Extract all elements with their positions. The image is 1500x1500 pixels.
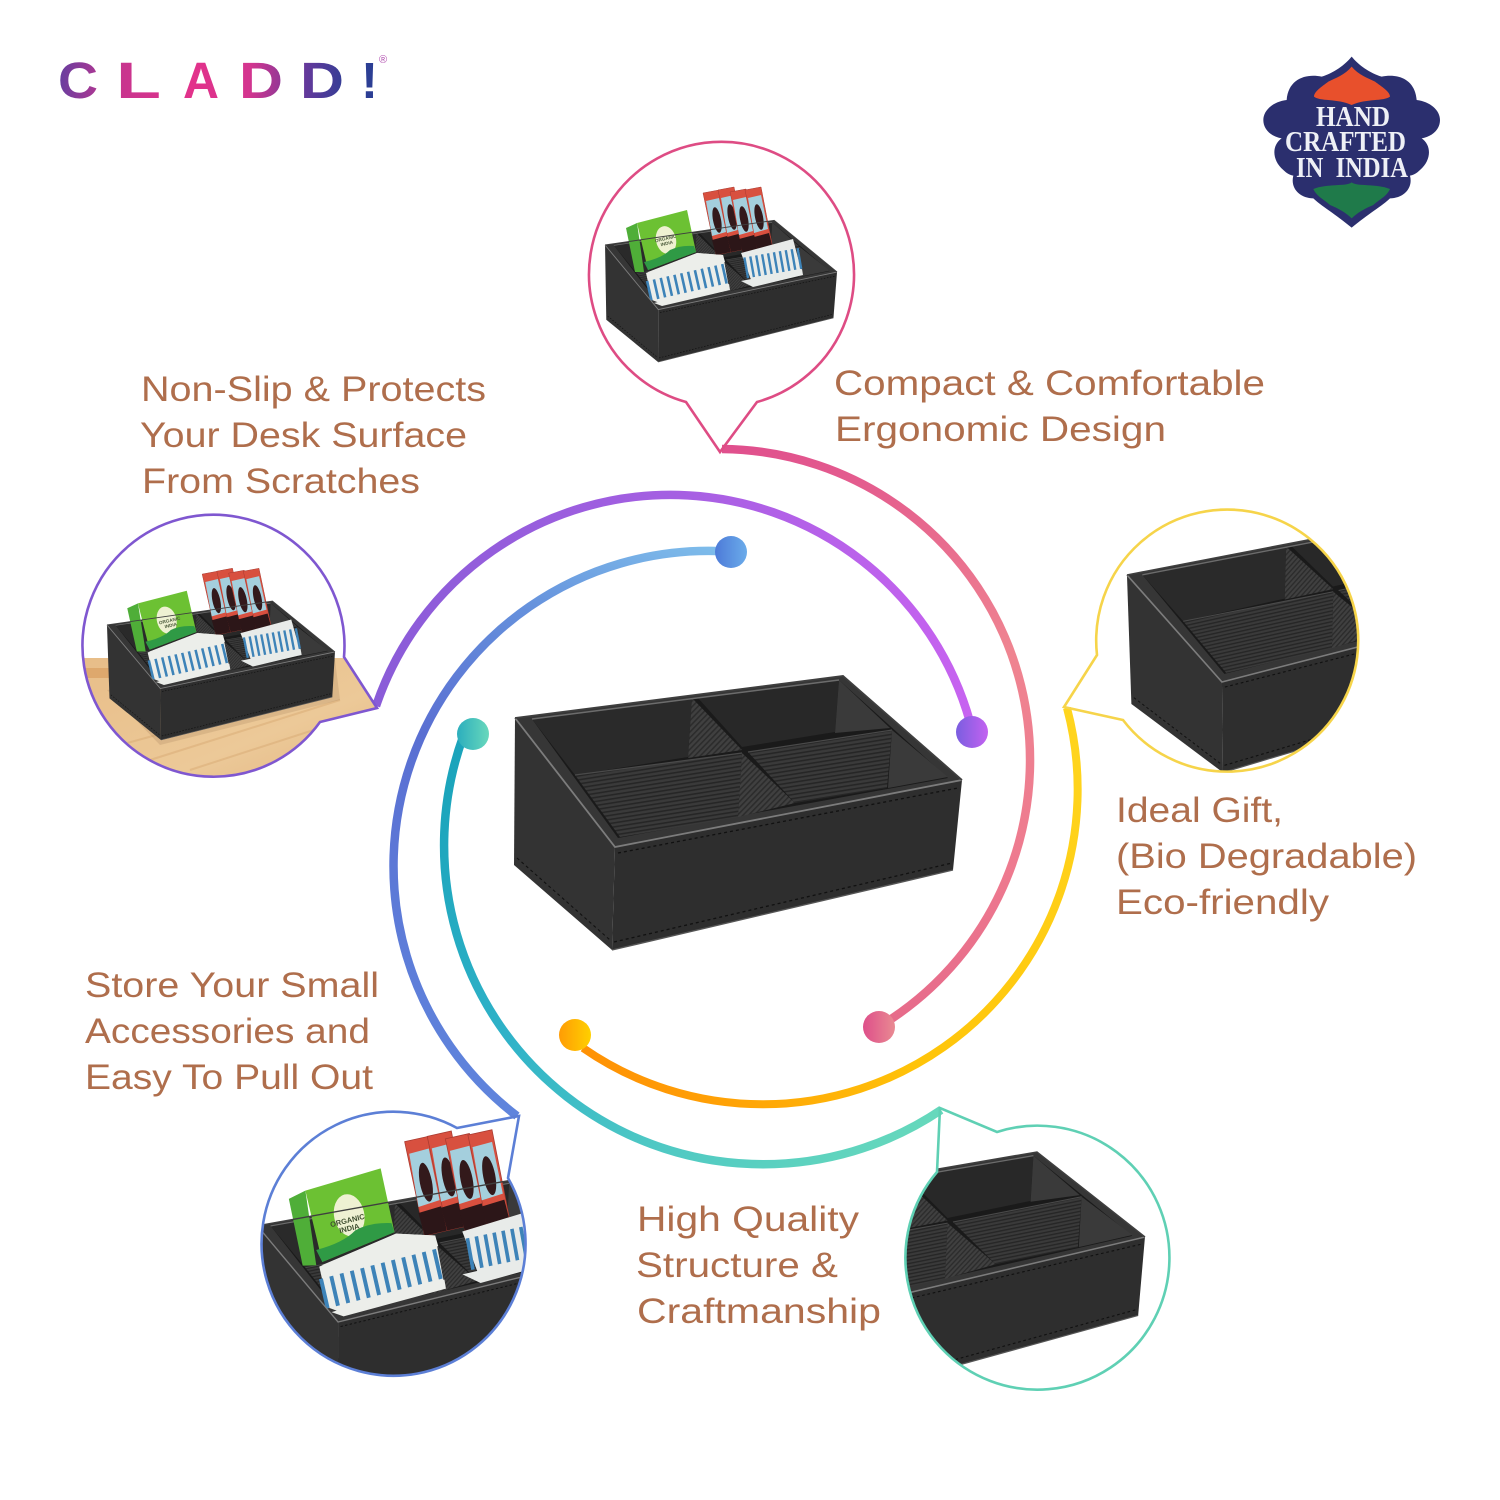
logo: CLADDI wordmark: ® [379,54,387,66]
callout bubble: compact design (pink) [589,142,854,452]
callout bubble: structure close-up (teal) [904,1106,1171,1391]
callout bubble: compact design (pink): INDIA [660,239,674,247]
text: compact and comfortable: Ergonomic Design [835,410,1166,449]
text: compact and comfortable [834,364,1265,449]
logo: CLADDI wordmark: A [183,52,219,109]
callout bubble: stored accessories close-up (blue) [260,1110,527,1378]
text: store accessories: Easy To Pull Out [85,1058,373,1097]
text: non-slip: Non-Slip & Protects [141,370,486,409]
central product: black organizer box [514,676,962,950]
text: high quality: High Quality [637,1200,860,1239]
callout bubble: non-slip on wood desk (purple): ORGANIC [159,616,181,625]
callout bubble: non-slip on wood desk (purple): INDIA [164,621,178,629]
text: non-slip: From Scratches [142,462,420,501]
text: high quality: Structure & [636,1246,838,1285]
text: ideal gift: (Bio Degradable) [1116,837,1417,876]
text: high quality [636,1200,881,1331]
badge: hand crafted in India: CRAFTED [1285,127,1406,158]
dot: blue arc end [715,536,747,568]
logo: CLADDI wordmark: D [300,52,344,109]
text: non-slip [140,370,486,501]
dot: purple arc end [956,716,988,748]
text: ideal gift [1116,791,1417,922]
dot: pink arc end [863,1011,895,1043]
badge: hand crafted in India [1263,57,1440,228]
logo: CLADDI wordmark: ! [361,52,378,109]
logo: CLADDI wordmark [58,52,387,109]
text: store accessories: Store Your Small [85,966,379,1005]
text: ideal gift: Eco-friendly [1116,883,1330,922]
dot: teal arc end [457,718,489,750]
callout bubble: stored accessories close-up (blue): ORGANIC [329,1212,366,1229]
text: compact and comfortable: Compact & Comfortable [834,364,1265,403]
badge: hand crafted in India: HAND [1316,102,1390,133]
arc: blue [394,551,716,1116]
callout bubble: stored accessories close-up (blue): INDIA [338,1221,361,1235]
arc: pink [722,449,1030,1023]
text: ideal gift: Ideal Gift, [1116,791,1283,830]
callout bubble: box side close-up (yellow) [1062,508,1360,773]
text: store accessories [85,966,379,1097]
arc: yellow [583,708,1078,1104]
arc: teal [444,737,941,1164]
dot: orange arc end [559,1019,591,1051]
badge: hand crafted in India: IN INDIA [1296,153,1409,184]
text: high quality: Craftmanship [637,1292,881,1331]
callout bubble: compact design (pink): ORGANIC [655,234,677,243]
text: non-slip: Your Desk Surface [140,416,467,455]
logo: CLADDI wordmark: L [116,52,161,109]
logo: CLADDI wordmark: D [239,52,283,109]
callout bubble: non-slip on wood desk (purple) [81,513,379,778]
arc: purple [376,495,970,722]
logo: CLADDI wordmark: C [58,52,98,109]
text: store accessories: Accessories and [85,1012,370,1051]
